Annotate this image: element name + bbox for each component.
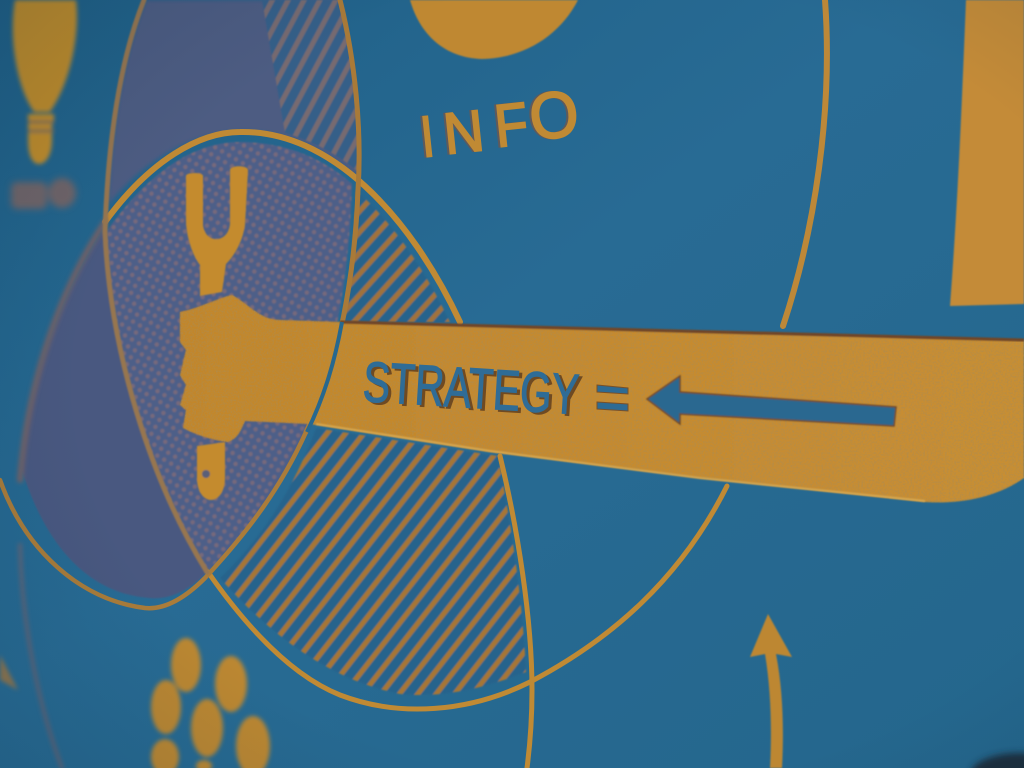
equals sign: [597, 385, 628, 411]
panel: dotted central lens: [106, 142, 352, 572]
ring: small circle top arc: [105, 132, 460, 322]
dark corner, lower right: [970, 753, 1024, 768]
heading: STRATEGY: STRATEGY: [361, 350, 581, 427]
icon: tuning fork handle bottom: [197, 442, 225, 500]
ring: large circle right side: [783, 0, 827, 326]
ring: circle continuation below arm: [500, 456, 532, 768]
small blurred mark at left edge: [0, 655, 18, 690]
title: INFO: [418, 76, 582, 170]
blue cut line through arm: [307, 322, 342, 432]
title: INFO: I: [418, 104, 437, 170]
arm top edge shadow: [340, 322, 1024, 340]
ring: upper vertical curve: [306, 0, 359, 432]
title: INFO shadow: I: [416, 104, 435, 170]
panel: lower hatched wedge: [220, 428, 526, 695]
title: INFO: F: [491, 90, 531, 161]
title: INFO shadow: [416, 76, 580, 170]
top right gold rectangle: [950, 0, 1024, 306]
arm with fist: [180, 295, 1024, 502]
title: INFO: N: [441, 98, 487, 166]
ring: small circle blurred left arc: [20, 222, 105, 480]
panel: left dark purple lens: [22, 226, 207, 598]
hatch: upper right of top lens: [262, 0, 358, 172]
ring: lower-left loop: [0, 432, 306, 608]
title: INFO: O: [526, 76, 582, 154]
title: INFO shadow: O: [524, 76, 580, 154]
arrow inside arm pointing left: [647, 376, 896, 426]
panel: top purple lens: [108, 0, 358, 205]
icon: light bulb: [13, 0, 77, 164]
arm bottom edge highlight: [316, 424, 925, 501]
heading shadow: STRATEGY: STRATEGY: [364, 352, 584, 429]
blurred bulb label: [11, 178, 76, 209]
icon: tuning fork top: [186, 166, 248, 296]
icon: dot cluster: [151, 638, 270, 768]
ring: large circle lower side: [208, 486, 727, 709]
title: INFO shadow: F: [489, 90, 529, 161]
panel: upper hatched wedge: [342, 190, 450, 322]
ring: left blurred edge of large circle: [105, 0, 207, 572]
ring: faint lower-left arc: [20, 545, 62, 768]
arrow bottom pointing up: [750, 614, 792, 768]
title: INFO shadow: N: [439, 98, 485, 166]
top semicircle badge: [410, 0, 578, 59]
